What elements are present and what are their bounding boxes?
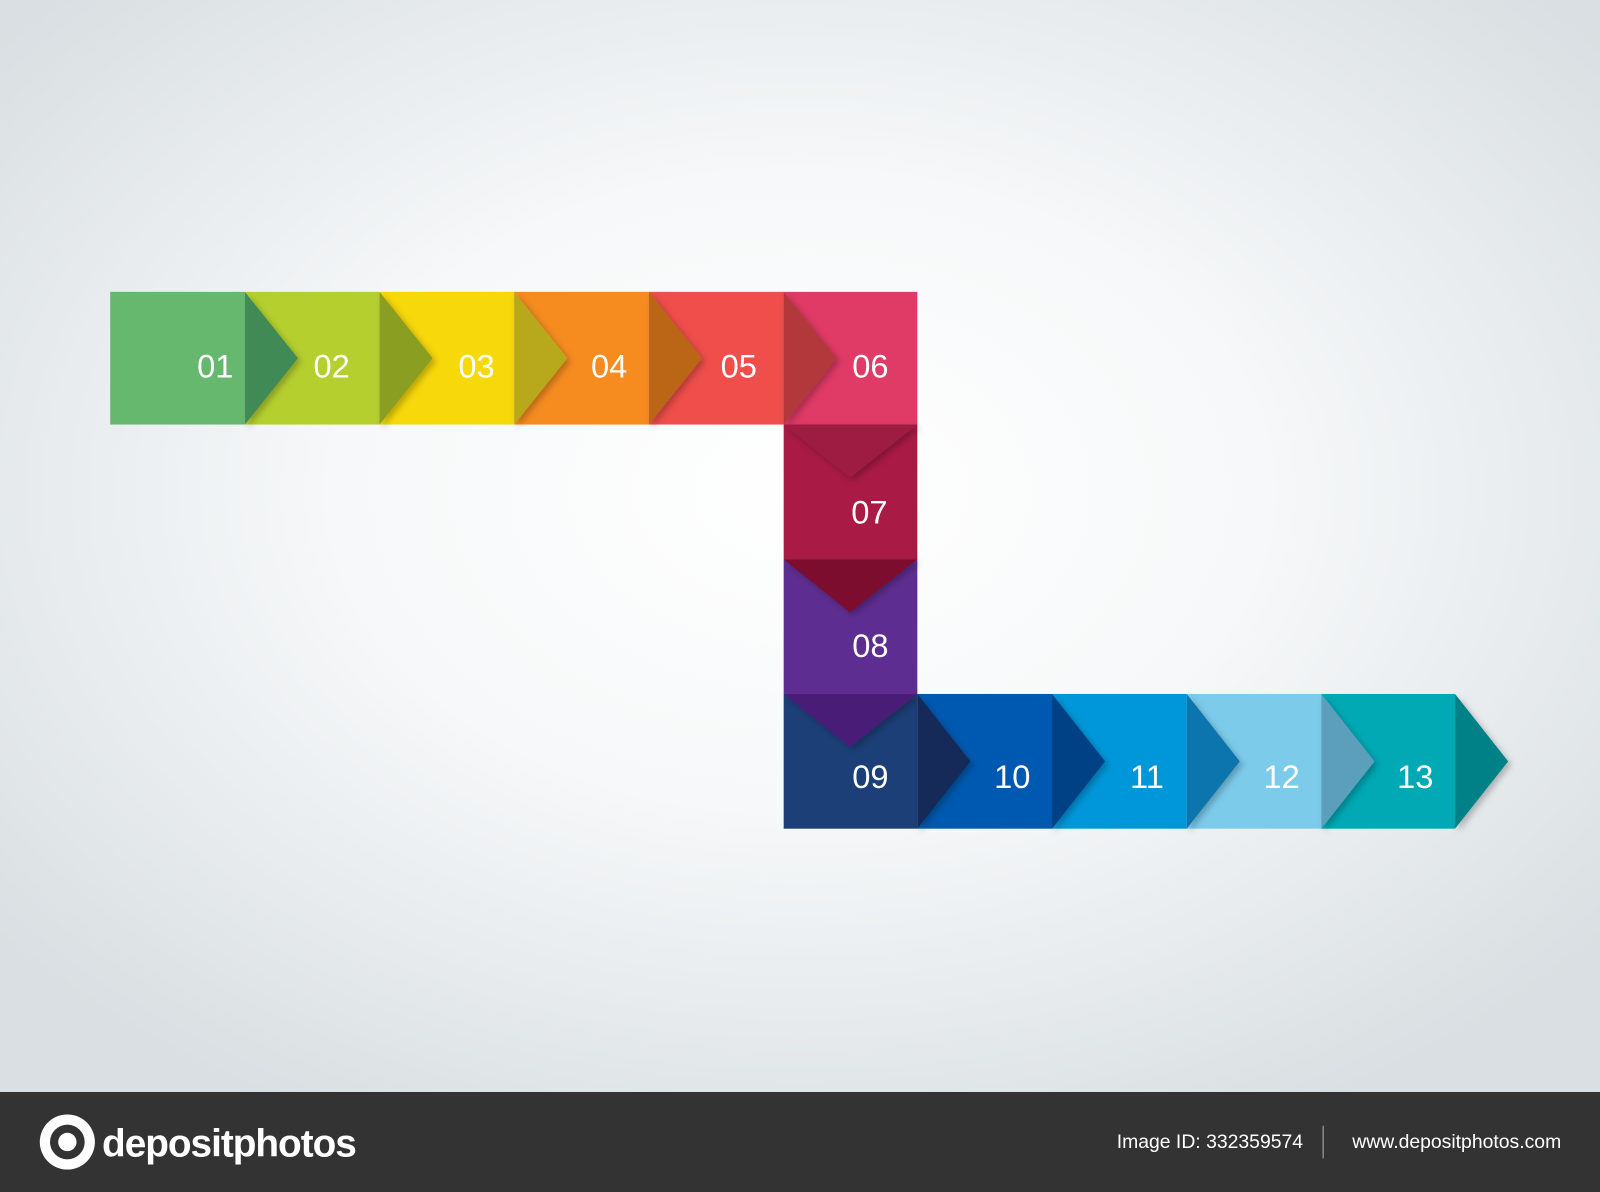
step numbers: 06 (852, 348, 889, 385)
step boxes (110, 292, 1455, 829)
step numbers: 09 (852, 758, 889, 795)
footer bar (0, 1092, 1600, 1192)
step numbers: 01 (197, 348, 233, 385)
step numbers (197, 348, 1433, 795)
footer logo: depositphotos (102, 1122, 356, 1165)
step numbers: 11 (1130, 758, 1164, 795)
step numbers: 13 (1397, 758, 1433, 795)
step numbers: 05 (721, 348, 757, 385)
step numbers: 03 (458, 348, 495, 385)
step diagram (110, 292, 1508, 829)
arrow tips (245, 292, 1508, 829)
step numbers: 02 (313, 348, 350, 385)
footer url: www.depositphotos.com (1351, 1131, 1561, 1153)
step numbers: 12 (1263, 758, 1300, 795)
step numbers: 10 (994, 758, 1030, 795)
step numbers: 04 (591, 348, 627, 385)
footer logo (40, 1114, 356, 1170)
step numbers: 07 (851, 494, 888, 531)
footer image id: Image ID: 332359574 (1117, 1131, 1303, 1153)
step numbers: 08 (852, 627, 889, 664)
